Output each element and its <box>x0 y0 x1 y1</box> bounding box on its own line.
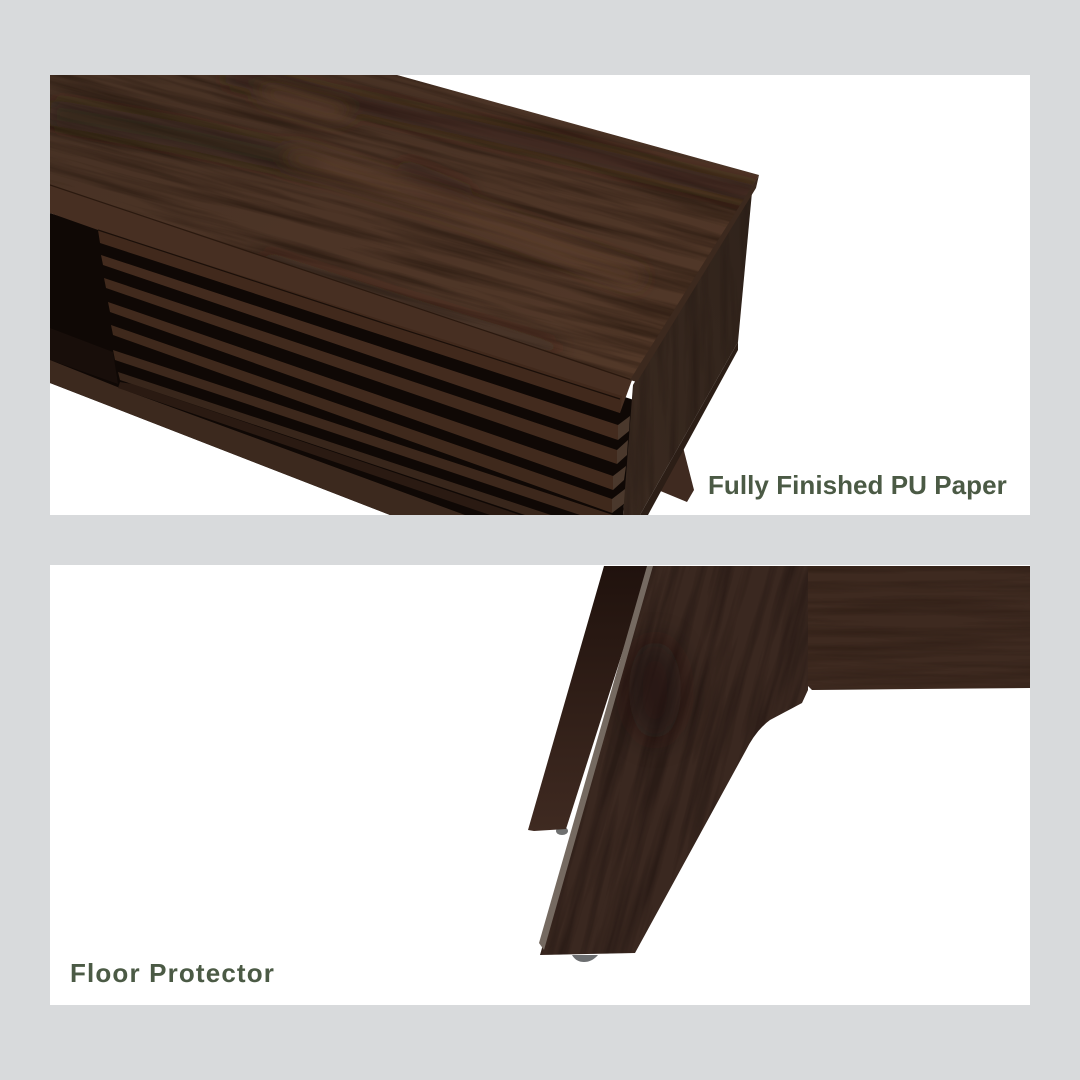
panel: fully finished PU paper <box>50 75 1030 515</box>
icon: rear floor protector <box>556 827 568 835</box>
dark and light wood figure <box>50 75 760 350</box>
panel background: bottom <box>50 565 1030 1005</box>
panel: floor protector <box>50 565 1030 1005</box>
illustration: leg close-up <box>528 566 1030 962</box>
slats <box>101 255 630 515</box>
icon: front floor protector <box>572 955 598 962</box>
illustration: TV console top close-up <box>50 75 759 515</box>
label: Floor Protector: Floor Protector <box>70 958 275 988</box>
slat ends <box>612 489 625 513</box>
crossbar rail <box>808 566 1030 690</box>
bottom rail <box>50 360 465 515</box>
label: Fully Finished PU Paper: Fully Finished PU Paper <box>708 470 1007 500</box>
top surface with wood grain <box>50 75 759 381</box>
top front edge <box>50 185 632 413</box>
back leg <box>528 566 650 831</box>
back leg <box>661 450 694 502</box>
panel background: top <box>50 75 1030 515</box>
leg edge highlight <box>539 566 653 950</box>
side panel <box>620 175 760 520</box>
front leg <box>540 566 808 955</box>
black interior <box>50 213 634 515</box>
open shelf shadow <box>50 328 118 384</box>
